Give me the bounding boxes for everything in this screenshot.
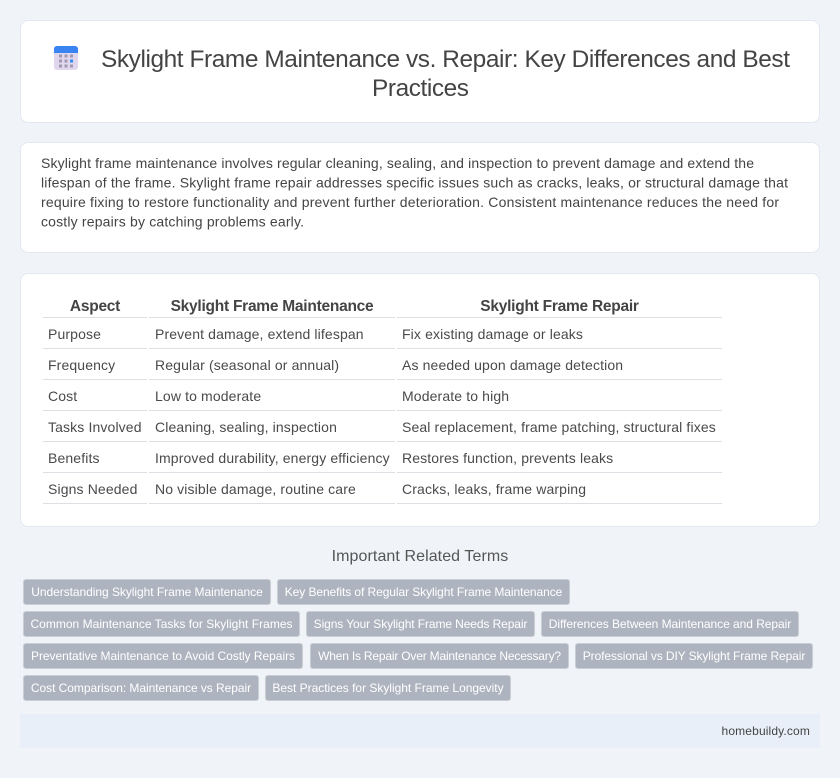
table header — [70, 298, 639, 315]
row: tasks involved: Cleaning, sealing, inspection — [155, 419, 337, 435]
table header: Aspect — [70, 298, 120, 315]
tag: Cost Comparison: Maintenance vs Repair — [31, 681, 251, 695]
title: Skylight Frame Maintenance vs. Repair: Key Differences and Best — [101, 46, 790, 73]
related term tags — [23, 579, 813, 701]
tag — [575, 643, 813, 669]
title: Practices — [372, 75, 469, 102]
row: benefits: Benefits — [48, 450, 100, 466]
row: cost: Moderate to high — [402, 388, 509, 404]
tag — [277, 579, 570, 605]
row: tasks involved: Seal replacement, frame patching, structural fixes — [402, 419, 716, 435]
tag: Professional vs DIY Skylight Frame Repair — [583, 649, 805, 663]
tag — [306, 611, 535, 637]
row: tasks involved — [48, 419, 716, 435]
row: frequency: Frequency — [48, 357, 115, 373]
row: frequency — [48, 357, 623, 373]
title — [101, 46, 790, 102]
tag — [23, 579, 271, 605]
text block: introduction paragraph: costly repairs by catching problems early. — [41, 214, 304, 230]
text block: introduction paragraph: require fixing to restore functionality and prevent further deterioration. Consistent maintenance reduces the need for — [41, 194, 779, 210]
row: purpose — [48, 326, 583, 342]
row: signs needed: No visible damage, routine care — [155, 481, 356, 497]
tag: Key Benefits of Regular Skylight Frame Maintenance — [285, 585, 562, 599]
row: cost: Cost — [48, 388, 77, 404]
tag: Differences Between Maintenance and Repair — [549, 617, 791, 631]
comparison table — [43, 298, 722, 504]
row: signs needed: Cracks, leaks, frame warping — [402, 481, 586, 497]
tag — [23, 643, 303, 669]
icon: calendar — [54, 46, 78, 70]
table header: Skylight Frame Maintenance — [171, 298, 373, 315]
footer — [20, 714, 820, 748]
heading: important related terms: Important Related Terms — [332, 548, 508, 565]
panel: comparison table — [20, 273, 820, 527]
row: signs needed: Signs Needed — [48, 481, 138, 497]
row: cost — [48, 388, 509, 404]
footer source text: homebuildy.com — [722, 724, 810, 738]
tag: Preventative Maintenance to Avoid Costly Repairs — [31, 649, 295, 663]
row: purpose: Purpose — [48, 326, 101, 342]
text block: introduction paragraph: lifespan of the frame. Skylight frame repair addresses specific issues such as cracks, leaks, or structural damage that — [41, 174, 788, 190]
row: tasks involved: Tasks Involved — [48, 419, 142, 435]
tag: Common Maintenance Tasks for Skylight Frames — [30, 617, 293, 631]
row: purpose: Fix existing damage or leaks — [402, 326, 583, 342]
table header: Skylight Frame Repair — [480, 298, 639, 315]
row: purpose: Prevent damage, extend lifespan — [155, 326, 364, 342]
tag — [265, 675, 511, 701]
row: cost: Low to moderate — [155, 388, 261, 404]
row: benefits: Improved durability, energy efficiency — [155, 450, 390, 466]
tag: Understanding Skylight Frame Maintenance — [31, 585, 263, 599]
text block: introduction paragraph: Skylight frame maintenance involves regular cleaning, sealing, and inspection to prevent damage and extend the — [41, 155, 754, 171]
tag: When Is Repair Over Maintenance Necessary? — [318, 649, 561, 663]
panel: introduction — [20, 142, 820, 253]
tag — [23, 611, 300, 637]
row: frequency: As needed upon damage detection — [402, 357, 623, 373]
row: benefits: Restores function, prevents leaks — [402, 450, 613, 466]
tag — [541, 611, 799, 637]
row: signs needed — [48, 481, 586, 497]
tag — [310, 643, 569, 669]
tag — [23, 675, 259, 701]
text block: introduction paragraph — [41, 155, 788, 230]
panel: title header — [20, 20, 820, 123]
tag: Best Practices for Skylight Frame Longevity — [272, 681, 504, 695]
row: benefits — [48, 450, 613, 466]
row: frequency: Regular (seasonal or annual) — [155, 357, 339, 373]
tag: Signs Your Skylight Frame Needs Repair — [314, 617, 527, 631]
